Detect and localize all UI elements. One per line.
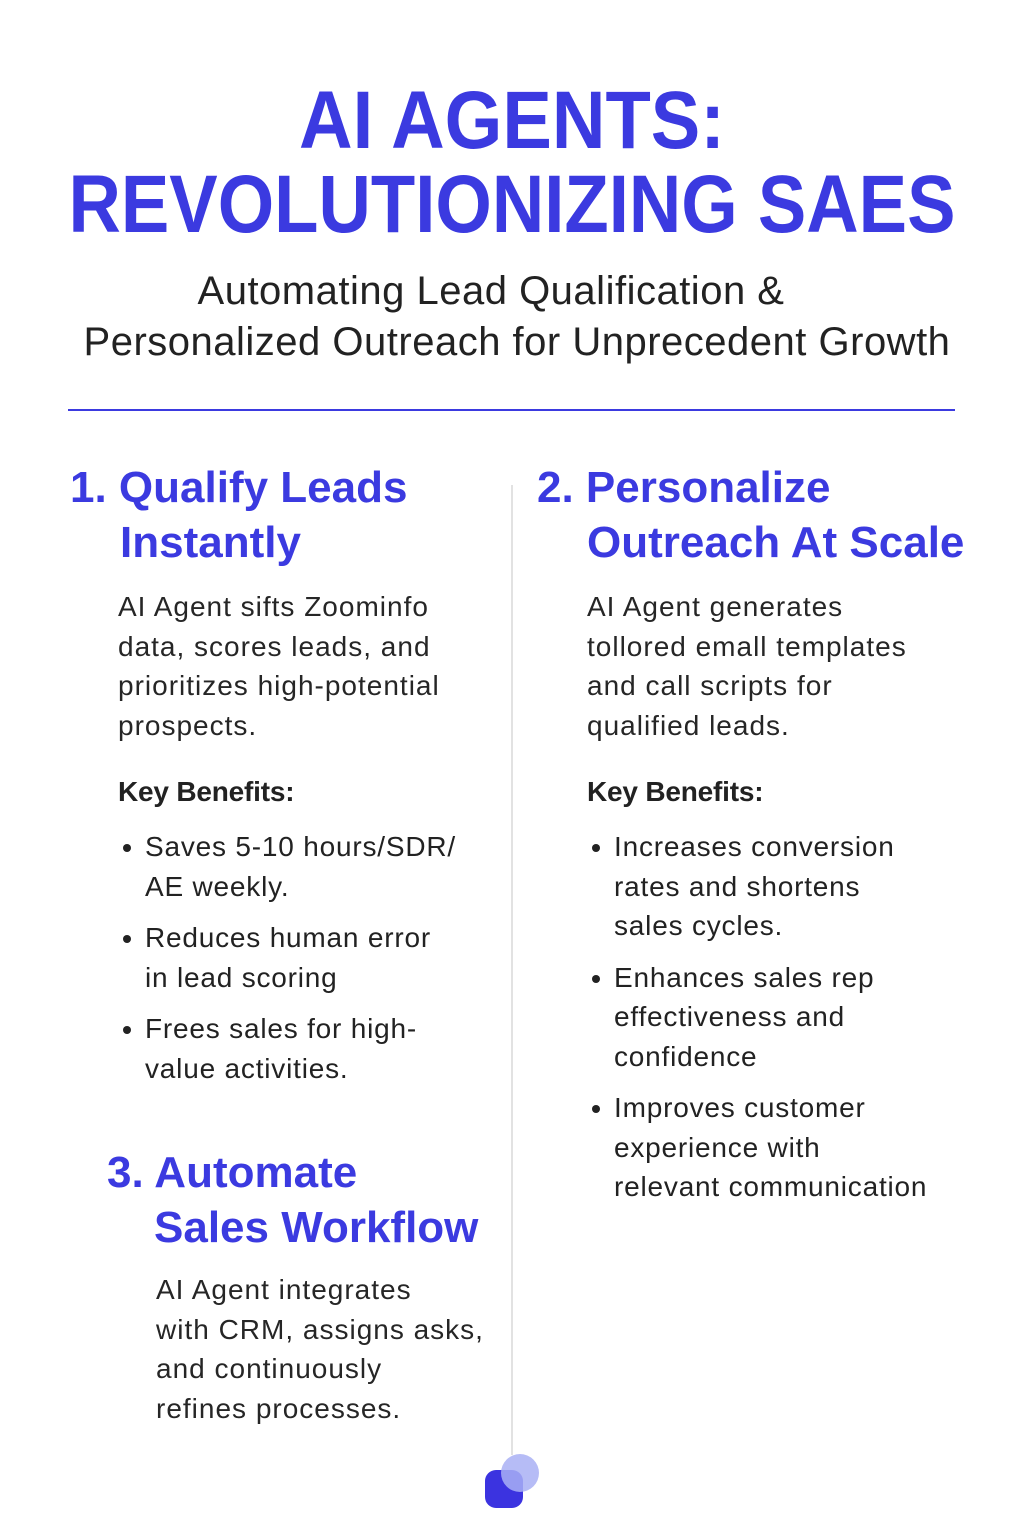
- body 2: and call scripts for: [587, 670, 833, 701]
- bullets 2: Improves customer: [614, 1092, 866, 1123]
- body 3: with CRM, assigns asks,: [156, 1314, 484, 1344]
- bullets 1: Frees sales for high-: [145, 1013, 417, 1044]
- heading 2: [537, 463, 964, 567]
- bullets 1: Saves 5-10 hours/SDR/: [145, 831, 456, 862]
- body 3: and continuously: [156, 1353, 382, 1384]
- heading 2: Outreach At Scale: [587, 518, 964, 567]
- heading 1: [70, 463, 407, 567]
- key benefits 1: Key Benefits:: [118, 776, 294, 807]
- bullets 2: confidence: [614, 1040, 757, 1072]
- body 1: data, scores leads, and: [118, 630, 431, 662]
- bullets 1: [123, 831, 456, 1084]
- bullets 1: in lead scoring: [145, 962, 338, 992]
- bullets 2: [592, 831, 927, 1202]
- key benefits 2: Key Benefits:: [587, 776, 763, 807]
- heading 1: 1. Qualify Leads: [70, 463, 407, 512]
- bullets 1: Reduces human error: [145, 922, 431, 953]
- title: [68, 80, 956, 250]
- subtitle: [84, 269, 950, 364]
- bullets 2: experience with: [614, 1132, 821, 1162]
- panel: qualify leads: [70, 463, 456, 1084]
- heading 3: 3. Automate: [107, 1148, 357, 1197]
- subtitle: Personalized Outreach for Unprecedent Growth: [84, 320, 950, 364]
- icon: overlapping shapes: [485, 1454, 539, 1508]
- panel: personalize outreach: [537, 463, 964, 1202]
- body 1: prioritizes high-potential: [118, 670, 440, 701]
- body 1: AI Agent sifts Zoominfo: [118, 591, 429, 622]
- bullets 2: effectiveness and: [614, 1001, 845, 1032]
- bullets 1: AE weekly.: [145, 870, 289, 902]
- body 2: qualified leads.: [587, 710, 790, 740]
- body 2: tollored emall templates: [587, 630, 907, 662]
- bullets 2: sales cycles.: [614, 910, 783, 941]
- bullets 2: rates and shortens: [614, 870, 860, 902]
- heading 2: 2. Personalize: [537, 463, 830, 512]
- heading 3: Sales Workflow: [154, 1203, 478, 1252]
- body 3: [156, 1274, 484, 1424]
- panel: automate workflow: [107, 1148, 484, 1424]
- body 3: AI Agent integrates: [156, 1274, 412, 1305]
- body 1: prospects.: [118, 710, 257, 740]
- heading 1: Instantly: [120, 518, 301, 567]
- body 3: refines processes.: [156, 1392, 401, 1424]
- body 2: AI Agent generates: [587, 591, 843, 622]
- body 2: [587, 591, 907, 741]
- bullets 1: value activities.: [145, 1052, 348, 1084]
- body 1: [118, 591, 440, 741]
- subtitle: Automating Lead Qualification &: [198, 269, 784, 313]
- bullets 2: relevant communication: [614, 1171, 927, 1202]
- heading 3: [107, 1148, 478, 1252]
- bullets 2: Enhances sales rep: [614, 962, 874, 992]
- bullets 2: Increases conversion: [614, 831, 895, 862]
